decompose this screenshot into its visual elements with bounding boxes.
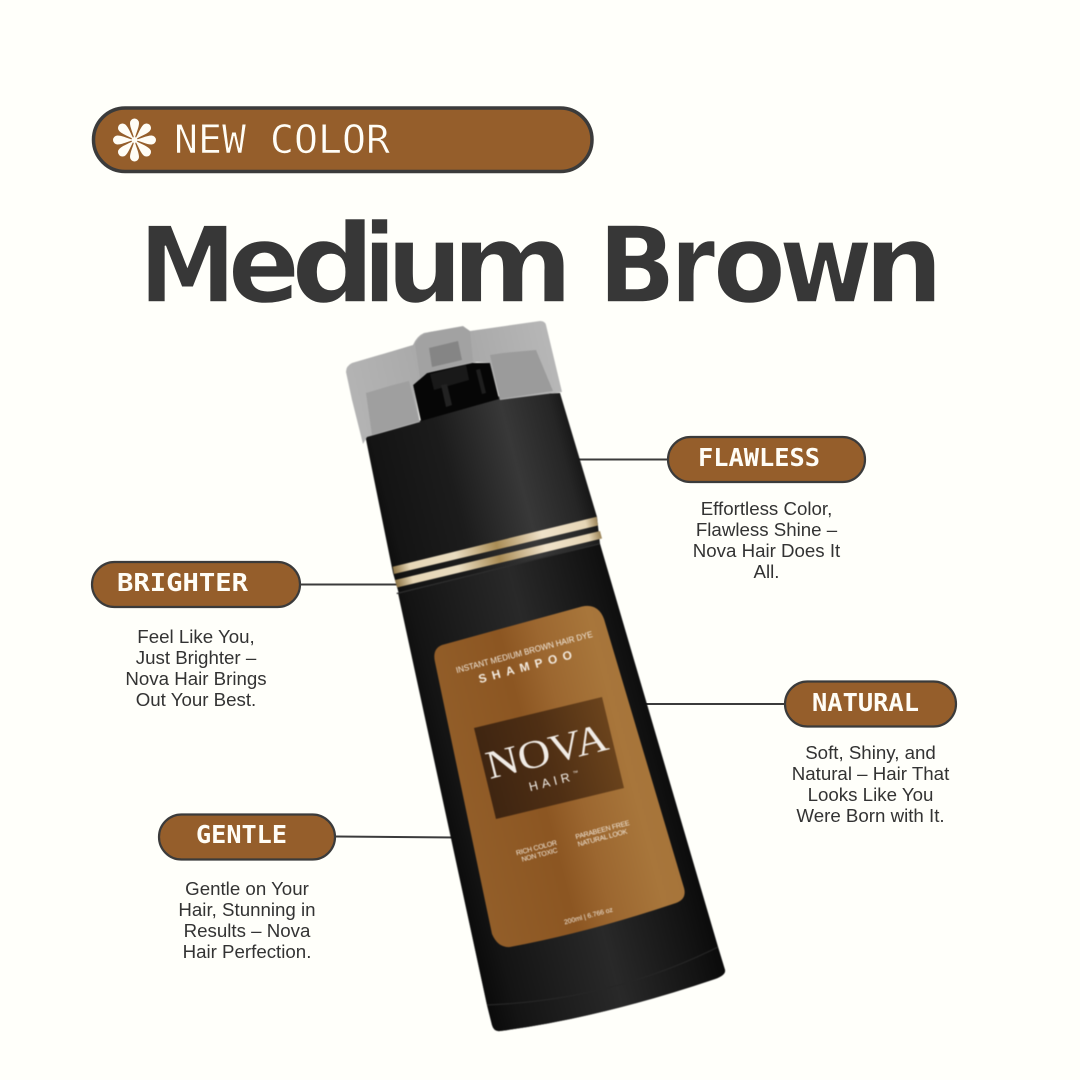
callout: gentle: Results – Nova xyxy=(184,920,311,941)
title: i xyxy=(363,200,396,328)
bottle label: NON TOXIC xyxy=(521,847,558,864)
title: e xyxy=(228,200,300,328)
callout: natural: Natural – Hair That xyxy=(792,763,950,784)
callout: gentle xyxy=(159,814,335,962)
label shampoo: SHAMPOO xyxy=(477,646,579,686)
bottle cap xyxy=(346,321,562,444)
icon: flower xyxy=(113,118,156,162)
callout: flawless: All. xyxy=(754,561,779,582)
connector: flawless xyxy=(575,458,668,460)
callout: brighter: Just Brighter – xyxy=(136,647,257,668)
label claims: RICH COLOR xyxy=(515,840,558,857)
callout: natural xyxy=(785,682,956,826)
connector: brighter xyxy=(300,584,400,586)
cap inner left block xyxy=(366,381,419,435)
callout: natural: NATURAL xyxy=(812,688,919,717)
title: B xyxy=(598,205,676,327)
callout: gentle: Gentle on Your xyxy=(185,878,309,899)
callout: brighter: Nova Hair Brings xyxy=(125,668,267,689)
callout: natural: Soft, Shiny, and xyxy=(805,742,936,763)
callout: brighter xyxy=(92,562,300,710)
callout: flawless: Effortless Color, xyxy=(701,498,832,519)
title: M xyxy=(139,205,236,327)
cap inner right block xyxy=(490,350,553,399)
callout: gentle: Hair Perfection. xyxy=(183,941,311,962)
callout: gentle: GENTLE xyxy=(196,820,287,849)
gold bands xyxy=(393,517,602,594)
bottle label: ™ xyxy=(572,770,579,777)
title: r xyxy=(671,200,715,328)
logo: NOVA xyxy=(481,714,612,788)
connector: natural xyxy=(645,703,785,705)
bottle body xyxy=(366,393,725,1031)
logo panel xyxy=(474,697,624,819)
bottle label: NATURAL LOOK xyxy=(577,828,629,849)
product bottle xyxy=(346,321,725,1031)
title: d xyxy=(291,200,375,328)
badge text: NEW COLOR xyxy=(174,118,391,163)
connector: gentle xyxy=(336,836,455,838)
callout: gentle: Hair, Stunning in xyxy=(178,899,316,920)
title: u xyxy=(386,200,463,328)
label heading: INSTANT MEDIUM BROWN HAIR DYE xyxy=(455,629,594,675)
title: w xyxy=(779,200,872,328)
title: o xyxy=(713,200,786,328)
cap dome xyxy=(415,327,473,378)
callout: flawless: Flawless Shine – xyxy=(696,519,838,540)
bottle label: PARABEEN FREE xyxy=(575,820,631,841)
title xyxy=(139,200,944,328)
callout: brighter: BRIGHTER xyxy=(117,568,248,597)
callout: flawless: FLAWLESS xyxy=(698,443,820,472)
callout: flawless: Nova Hair Does It xyxy=(693,540,841,561)
callout: flawless xyxy=(668,437,865,582)
bottle label: HAIR xyxy=(527,769,575,794)
badge: new color xyxy=(94,108,592,172)
callout: natural: Were Born with It. xyxy=(796,805,945,826)
title: n xyxy=(864,200,944,328)
callout: brighter: Out Your Best. xyxy=(136,689,256,710)
callout: natural: Looks Like You xyxy=(808,784,933,805)
bottle lower section xyxy=(398,544,725,1031)
bottle base ring xyxy=(487,947,718,1005)
bottle nozzle xyxy=(413,363,499,421)
cap centre block xyxy=(429,341,462,367)
callout: brighter: Feel Like You, xyxy=(137,626,255,647)
label volume: 200ml | 6.766 oz xyxy=(563,907,614,926)
title: m xyxy=(452,200,574,328)
bottle label xyxy=(434,606,685,947)
